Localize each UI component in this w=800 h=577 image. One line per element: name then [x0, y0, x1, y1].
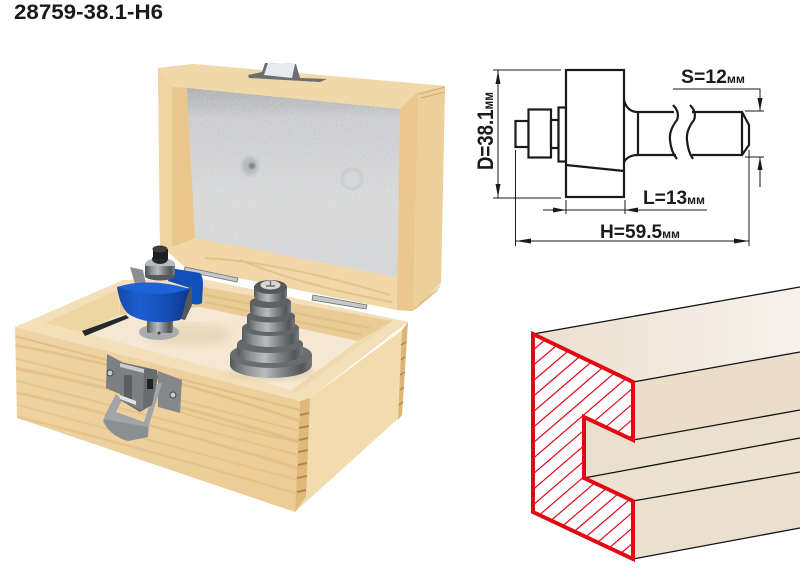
bearing 4: [247, 310, 295, 332]
carbide tips: [130, 267, 146, 284]
groove lower face: [584, 438, 800, 501]
bearing 2: [237, 335, 303, 363]
box rim: [15, 279, 408, 401]
box right inner wall: [292, 321, 393, 393]
label H: H=59.5мм: [600, 222, 680, 243]
box right side: [295, 322, 408, 512]
latch left plate: [106, 354, 122, 395]
shank end: [692, 112, 749, 155]
bearing: [528, 110, 551, 158]
dimension L: [543, 188, 707, 214]
shank: [624, 100, 676, 162]
dimension H: [516, 150, 749, 246]
hatched cross-section: [533, 334, 640, 560]
bearing 5: [250, 296, 291, 317]
title: 28759-38.1-H6: [14, 1, 163, 24]
lid right side: [413, 86, 445, 311]
hinge left: [184, 267, 238, 282]
latch: [103, 354, 182, 441]
bearing 3: [242, 320, 299, 347]
latch right plate: [158, 371, 182, 413]
bearing 1: [230, 342, 312, 378]
router bit: [117, 246, 232, 346]
bearing stack: [227, 280, 315, 381]
tip: [516, 121, 528, 147]
label D: D=38.1мм: [473, 92, 498, 170]
latch handle: [103, 383, 162, 441]
lower side face: [633, 472, 800, 559]
hinge right: [312, 295, 367, 309]
lid left inner wall: [172, 87, 195, 247]
groove back face: [584, 410, 800, 478]
cutter body: [566, 70, 624, 197]
break lines: [670, 105, 695, 159]
spacer: [551, 120, 558, 148]
top face: [533, 287, 800, 382]
box inner floor: [82, 307, 358, 390]
bearing 6: [254, 280, 287, 302]
lid top frame: [158, 64, 445, 109]
box lid: [158, 63, 445, 311]
stack shadow: [227, 365, 315, 381]
lid left frame: [158, 68, 172, 247]
bit shadow: [148, 324, 232, 346]
washer: [558, 108, 566, 162]
box back wall: [120, 287, 393, 341]
box dovetail corner: [295, 398, 310, 512]
wood profile illustration: [533, 287, 800, 560]
guide bearing: [145, 246, 175, 280]
blue front wing: [117, 282, 190, 322]
box left inner wall: [45, 290, 120, 332]
profile edges: [533, 287, 800, 559]
label L: L=13мм: [643, 188, 705, 209]
dimension S: [673, 67, 764, 187]
label S: S=12мм: [681, 67, 745, 88]
product photo: wooden box with router bit and bearings: [14, 63, 445, 512]
latch hasp: [120, 362, 158, 412]
foam lining: [187, 88, 400, 277]
upper side face: [633, 352, 800, 440]
box front face: [14, 327, 300, 512]
router bit outline: [516, 70, 749, 197]
blue back wing: [168, 268, 203, 304]
lid clasp: [248, 63, 327, 82]
box right dovetail: [398, 322, 408, 420]
bit shank collar: [139, 316, 179, 340]
cutter dimension drawing: [473, 67, 764, 246]
dimension D: [473, 70, 561, 198]
black strip: [82, 315, 129, 336]
lid lower inner wall: [160, 238, 397, 310]
lid right frame: [397, 92, 418, 311]
